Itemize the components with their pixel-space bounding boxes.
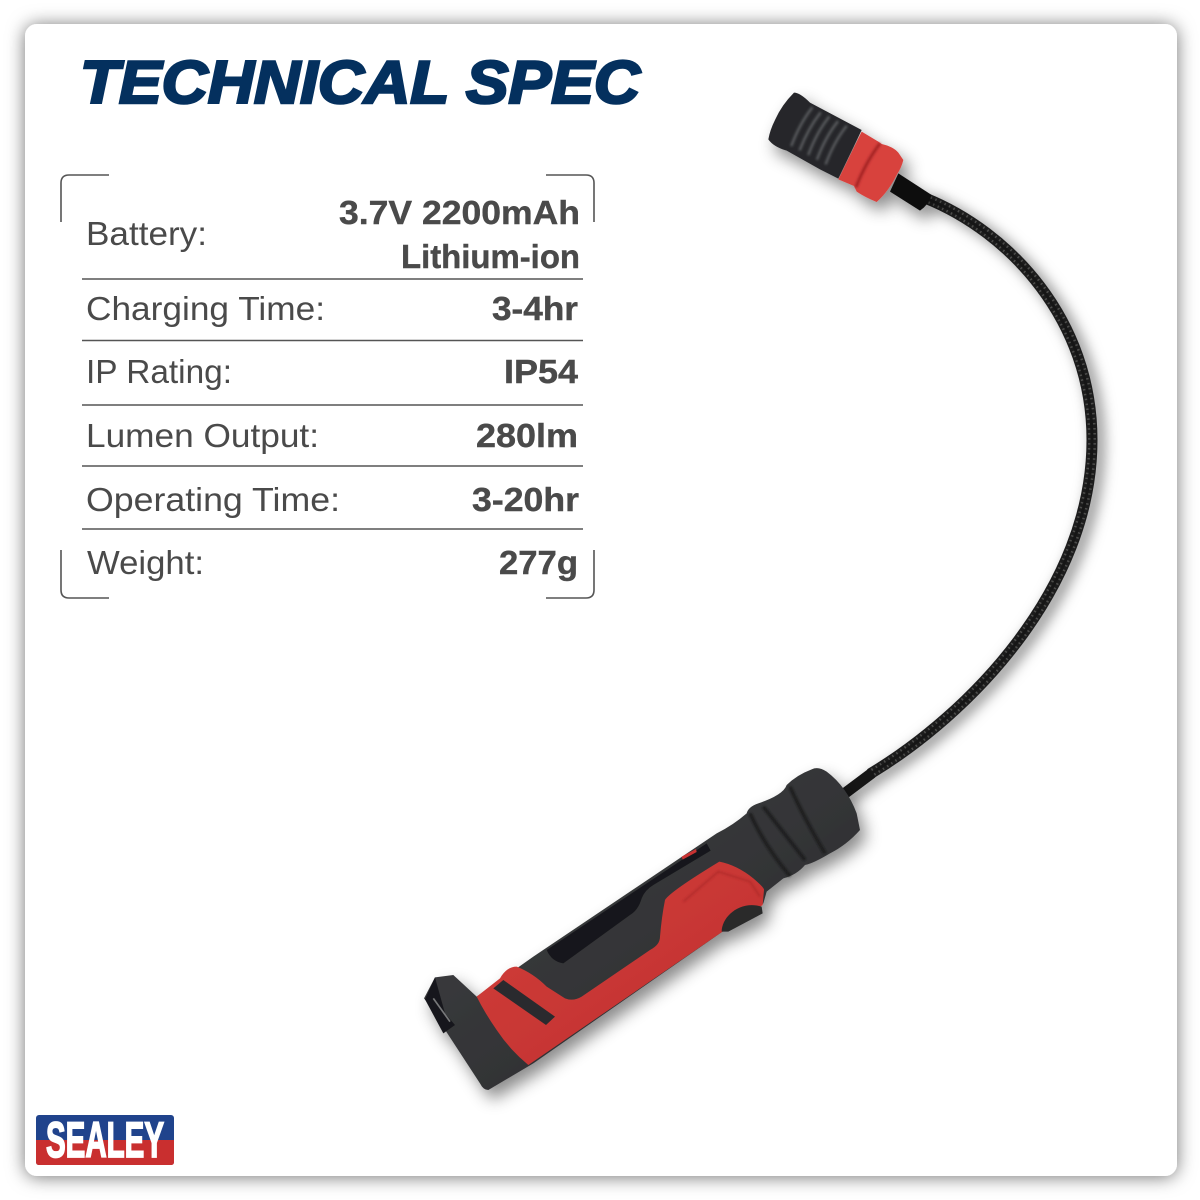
red grip button: [722, 905, 763, 932]
row: lumen output: 280lm: [476, 417, 578, 454]
row: weight: 277g: [499, 544, 578, 581]
lamp head: [768, 93, 932, 211]
lamp head red ring: [838, 132, 903, 202]
lamp head black grip: [768, 93, 862, 179]
row: lumen output: [86, 417, 578, 454]
row: operating time: 3-20hr: [472, 481, 579, 518]
row: battery: 3.7V 2200mAh: [339, 194, 580, 231]
logo wordmark: SEALEY: [46, 1112, 164, 1168]
red grip black stripe: [493, 980, 555, 1025]
row: battery: [86, 194, 580, 275]
row: lumen output: Lumen Output:: [86, 417, 319, 454]
row: battery: Lithium-ion: [401, 238, 580, 275]
row: weight: [87, 544, 578, 581]
row: operating time: Operating Time:: [86, 481, 340, 518]
control panel: [547, 843, 711, 963]
lamp head collar rod: [890, 173, 932, 211]
row: IP rating: [86, 353, 579, 390]
flexible gooseneck: [840, 198, 1092, 797]
product: inspection light: [424, 93, 1092, 1090]
table corner brackets: [61, 175, 594, 598]
row: charging time: 3-4hr: [492, 290, 578, 327]
grip rings: [750, 787, 825, 876]
logo badge on panel: [682, 849, 697, 860]
title: TECHNICAL SPEC: [80, 49, 642, 116]
row: operating time: [86, 481, 579, 518]
row: charging time: Charging Time:: [86, 290, 325, 327]
panel: specification table: [61, 175, 594, 598]
row: IP rating: IP54: [504, 353, 579, 390]
row: IP rating: IP Rating:: [86, 353, 232, 390]
handle: [424, 768, 860, 1090]
row: battery: Battery:: [86, 215, 207, 252]
USB port end cap: [425, 977, 455, 1033]
logo red band: [36, 1140, 174, 1165]
row: weight: Weight:: [87, 544, 204, 581]
row: charging time: [86, 290, 578, 327]
handle red grip: [477, 862, 764, 1065]
SEALEY logo: [36, 1112, 174, 1168]
handle black body: [424, 768, 860, 1090]
logo blue band: [36, 1115, 174, 1165]
